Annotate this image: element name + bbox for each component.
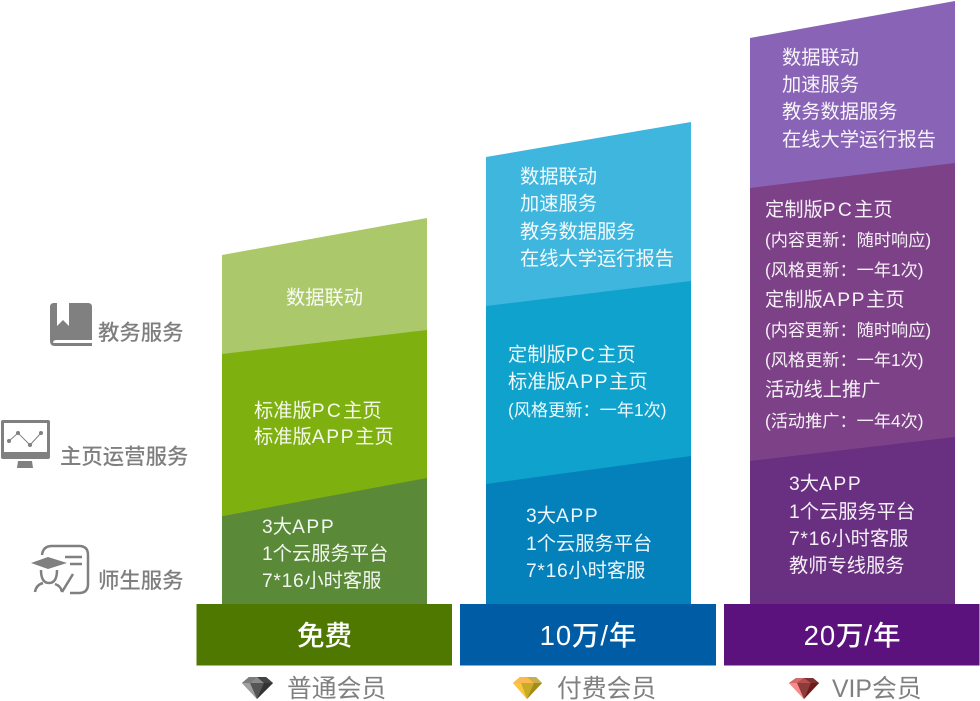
column: VIP tier (750, 1, 955, 604)
band: 教务服务: 在线大学运行报告 (520, 248, 674, 270)
band: 教务服务: 加速服务 (782, 74, 859, 96)
band: 教务服务: 数据联动 (782, 47, 859, 69)
band: 主页运营服务: 定制版PC主页 (765, 199, 893, 221)
band: 教务服务 (486, 122, 691, 307)
price bar: 10万/年 (460, 604, 716, 666)
icon: student with certificate (31, 546, 88, 593)
icon: monitor with line chart (1, 420, 50, 468)
icon: red gem (789, 678, 819, 699)
band: 主页运营服务: 定制版PC主页 (508, 344, 636, 366)
band: 教务服务 (222, 218, 427, 355)
row label: 教务服务 (50, 303, 184, 346)
icon: gold gem (513, 677, 542, 699)
band: 主页运营服务: 标准版PC主页 (254, 400, 382, 422)
column: paid tier (486, 122, 691, 604)
band: 师生服务: 1个云服务平台 (789, 501, 915, 523)
price bar: 10万/年: 10万/年 (540, 620, 637, 651)
band: 教务服务: 在线大学运行报告 (782, 129, 936, 151)
price bar: 20万/年 (724, 604, 980, 666)
band: 主页运营服务: (风格更新：一年1次) (765, 260, 924, 280)
row label: 教务服务: 教务服务 (98, 321, 184, 345)
band: 主页运营服务 (222, 330, 427, 516)
band: 主页运营服务: 标准版APP主页 (254, 426, 394, 448)
band: 师生服务: 3大APP (789, 473, 862, 495)
band: 主页运营服务 (750, 163, 955, 462)
band: 师生服务 (222, 478, 427, 604)
band: 师生服务: 教师专线服务 (789, 555, 904, 577)
row label: 主页运营服务 (1, 420, 188, 469)
price bar: 20万/年: 20万/年 (804, 620, 901, 651)
band: 教务服务: 教务数据服务 (520, 221, 636, 243)
band: 师生服务 (750, 437, 955, 604)
band: 师生服务: 7*16小时客服 (526, 560, 645, 582)
band: 师生服务: 7*16小时客服 (262, 570, 381, 592)
band: 主页运营服务: (活动推广：一年4次) (765, 411, 924, 431)
icon: grey gem (242, 677, 273, 699)
band: 师生服务: 7*16小时客服 (789, 528, 908, 550)
band: 主页运营服务 (486, 281, 691, 485)
band: 主页运营服务: (内容更新：随时响应) (765, 230, 931, 250)
band: 师生服务: 3大APP (526, 505, 599, 527)
band: 师生服务: 3大APP (262, 516, 335, 538)
band: 教务服务: 数据联动 (520, 166, 597, 188)
row label: 师生服务: 师生服务 (98, 569, 184, 593)
band: 师生服务: 1个云服务平台 (262, 543, 388, 565)
tier label: 普通会员 (242, 675, 386, 701)
band: 主页运营服务: 标准版APP主页 (508, 371, 648, 393)
row label: 师生服务 (31, 546, 184, 593)
band: 师生服务: 1个云服务平台 (526, 533, 652, 555)
band: 主页运营服务: (风格更新：一年1次) (765, 350, 924, 370)
icon: book (50, 303, 92, 346)
band: 教务服务 (750, 1, 955, 189)
band: 教务服务: 加速服务 (520, 193, 597, 215)
column: free tier (222, 218, 427, 604)
band: 主页运营服务: 定制版APP主页 (765, 289, 905, 311)
row label: 主页运营服务: 主页运营服务 (60, 445, 188, 469)
band: 师生服务 (486, 456, 691, 604)
price bar: 免费: 免费 (297, 620, 352, 651)
band: 主页运营服务: 活动线上推广 (765, 379, 880, 401)
band: 主页运营服务: (内容更新：随时响应) (765, 320, 931, 340)
tier label: 付费会员 (513, 675, 656, 701)
tier label: VIP会员 (789, 675, 922, 701)
band: 教务服务: 教务数据服务 (782, 101, 898, 123)
band: 教务服务: 数据联动 (286, 287, 363, 309)
price bar: 免费 (196, 604, 452, 666)
band: 主页运营服务: (风格更新：一年1次) (508, 400, 667, 420)
